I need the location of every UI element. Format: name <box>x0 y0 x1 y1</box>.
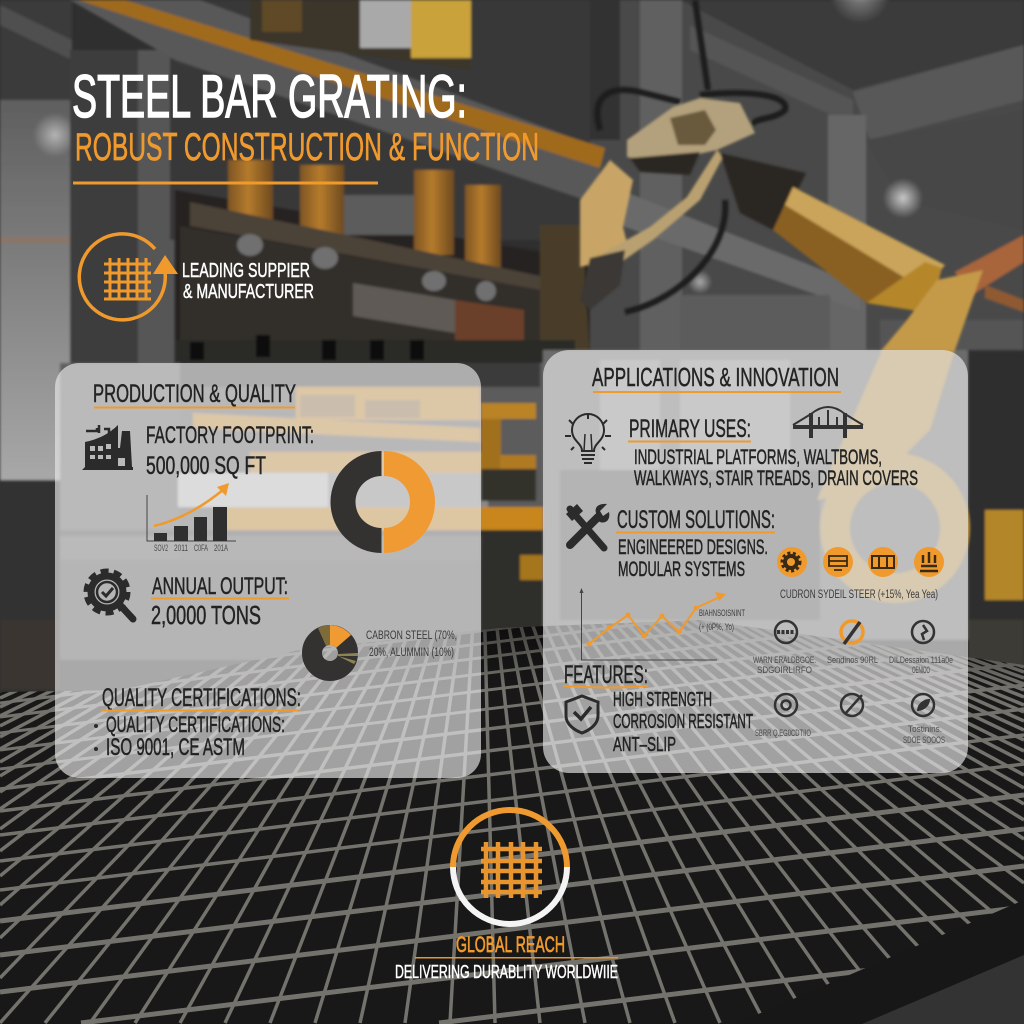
text: primary uses <box>628 415 751 443</box>
title underline <box>73 182 378 184</box>
icon: shield <box>566 696 598 733</box>
text: annual output: ANNUAL OUTPUT: <box>152 573 288 600</box>
icon: leaf <box>912 694 934 716</box>
icon: drop <box>912 621 934 643</box>
text: property row two captions: Tostinins. <box>908 724 942 734</box>
heading: applications and innovation: APPLICATIONS & INNOVATION <box>592 362 839 392</box>
background: robotic arm <box>580 0 983 588</box>
text: property row one captions: WARN ERALDBGOE. <box>753 655 816 665</box>
icon: gear and magnifier <box>86 571 133 619</box>
icon: bench badge <box>823 547 853 577</box>
list: certifications: QUALITY CERTIFICATIONS: <box>106 712 285 737</box>
bar chart: growth: 201A <box>214 543 228 553</box>
icons: property row two <box>775 694 934 716</box>
badge text <box>182 260 314 303</box>
icon: grating with circular arrow <box>79 234 178 320</box>
badge text: & MANUFACTURER <box>183 281 314 303</box>
icons: property row one <box>775 621 934 644</box>
text: features list <box>613 689 753 756</box>
icon: slash orange <box>841 621 863 644</box>
press upper region <box>170 0 590 240</box>
heading: production and quality: PRODUCTION & QUALITY <box>93 380 296 408</box>
icon: bridge <box>793 407 863 438</box>
icons: orange product badges <box>777 547 944 577</box>
text: growth caption: CUDRON SYDEIL STEER (+15%, Yea Yea) <box>780 589 938 601</box>
text: annual output <box>151 573 289 630</box>
panel: applications and innovation <box>543 350 968 773</box>
press body <box>175 190 590 400</box>
text: custom solutions: MODULAR SYSTEMS <box>618 558 745 581</box>
text: property row one captions <box>753 655 953 675</box>
pie chart legend: 20%, ALUMMIN (10%) <box>369 647 454 659</box>
icon: light bulb <box>565 413 611 463</box>
bar chart: growth: C0FA <box>194 543 208 553</box>
line chart: trend: (+ (0P%, Yo) <box>699 622 734 632</box>
text: custom solutions: ENGINEERED DESIGNS. <box>618 536 768 559</box>
text: features list: HIGH STRENGTH <box>613 689 712 711</box>
text: property row two captions <box>755 724 945 745</box>
text: factory footprint: FACTORY FOOTPRINT: <box>146 422 314 449</box>
text: features list: ANT–SLIP <box>613 734 676 756</box>
icon: grating mesh <box>481 842 542 898</box>
floor edge, bottom right <box>735 900 1024 1024</box>
text: primary uses: PRIMARY USES: <box>629 415 751 443</box>
pie chart: materials <box>312 625 358 671</box>
icon: wrench and hammer <box>566 504 609 548</box>
left window and column <box>0 0 72 110</box>
panel background <box>543 350 968 773</box>
list: certifications <box>94 712 285 761</box>
text: global reach: GLOBAL REACH <box>456 932 565 957</box>
line chart: trend: BIAHNSOISNINT <box>699 608 745 618</box>
line chart: trend <box>580 588 745 660</box>
text: tagline: DELIVERING DURABLITY WORLDWIIE <box>395 962 618 982</box>
subtitle: ROBUST CONSTRUCTION & FUNCTION <box>75 126 539 169</box>
behind right panel <box>543 350 968 640</box>
bar chart: growth: 2011 <box>174 543 188 553</box>
text: custom solutions <box>616 506 775 581</box>
divider <box>415 957 618 958</box>
title block <box>72 63 539 184</box>
text: factory footprint: 500,000 SQ FT <box>146 452 266 480</box>
text: features list: CORROSION RESISTANT <box>613 711 753 733</box>
icon: plant badge <box>914 547 944 577</box>
panel background <box>55 363 481 778</box>
icon: ring <box>453 810 567 924</box>
title: STEEL BAR GRATING: <box>72 63 467 130</box>
bar chart: growth: SOV2 <box>154 543 168 553</box>
icon: panel badge <box>868 547 898 577</box>
pie chart legend: CABRON STEEL (70%, <box>366 630 457 642</box>
text: factory footprint <box>146 422 314 480</box>
list: certifications: ISO 9001, CE ASTM <box>106 734 245 761</box>
icon: factory <box>82 425 133 470</box>
bar chart: growth <box>147 483 236 553</box>
panel: production and quality <box>55 363 481 778</box>
icon: ring <box>775 694 797 716</box>
text: custom solutions: CUSTOM SOLUTIONS: <box>617 506 775 534</box>
press lower, behind panels <box>60 363 600 653</box>
pie chart legend <box>366 630 457 659</box>
text: property row one captions: SDGOIRLIRFO <box>757 665 812 675</box>
text: property row two captions: SDOE SOOOS <box>903 735 945 745</box>
icon: gears badge <box>777 547 807 577</box>
icon: chain <box>775 621 797 643</box>
badge: leading supplier <box>79 234 314 320</box>
text: property row one captions: OENIOO <box>912 665 930 675</box>
heading: features: FEATURES: <box>564 661 648 689</box>
logo: global reach <box>395 810 618 982</box>
text: property row one captions: Sendinos 90RL <box>827 655 878 665</box>
donut chart <box>330 451 435 553</box>
text: property row two captions: SBRR Q.EG0CDTIIO <box>755 728 811 738</box>
text: annual output: 2,0000 TONS <box>151 600 261 630</box>
ceiling and bays, right <box>590 0 1024 360</box>
text: property row one captions: DILDessaion 111a0e <box>889 655 953 665</box>
heading: features <box>563 661 648 689</box>
text: primary uses list: INDUSTRIAL PLATFORMS, WALTBOMS, <box>634 446 882 469</box>
text: primary uses list <box>634 446 918 490</box>
background: steel grating floor <box>0 620 1024 1024</box>
heading: quality certifications: QUALITY CERTIFICATIONS: <box>102 684 301 712</box>
badge text: LEADING SUPPIER <box>182 260 310 282</box>
icon: blocked <box>841 694 863 716</box>
